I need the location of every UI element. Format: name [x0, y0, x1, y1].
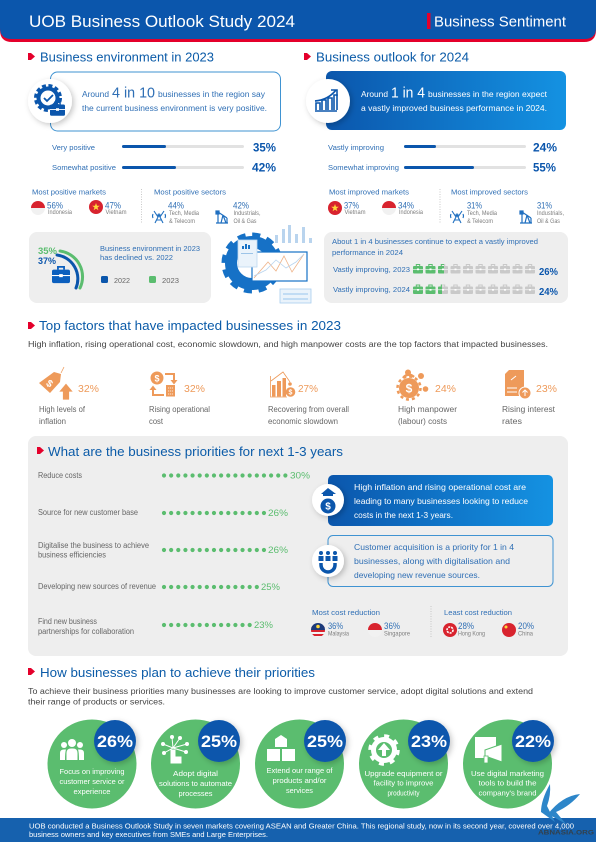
factor: operational cost: Rising operational — [149, 405, 210, 414]
icon: dollar with up arrow: $ — [325, 502, 331, 512]
factor: inflation: 32% — [78, 383, 99, 395]
dot chart: partnerships for collaboration — [38, 627, 134, 636]
item: upgrade equipment 23% — [359, 720, 450, 808]
item: digital solutions 25% — [151, 720, 240, 808]
most positive sectors: 44% — [168, 200, 184, 212]
radial gauge: 37% — [38, 256, 57, 267]
bar: somewhat improving: Somewhat improving — [328, 165, 399, 172]
dot chart: 25% — [261, 582, 281, 593]
bar: vastly improving: 24% — [533, 142, 557, 154]
bar: somewhat positive — [52, 162, 276, 174]
factor: operational cost: cost — [149, 417, 164, 426]
badge 22%: 22% — [515, 732, 551, 751]
panel: business outlook 2024 — [304, 50, 566, 174]
bar: very positive — [52, 142, 276, 154]
item: customer service 26%: customer service or — [60, 777, 125, 786]
most cost reduction: Singapore — [384, 632, 411, 638]
factor: inflation: $ — [44, 378, 55, 391]
dot chart: Developing new sources of revenue — [38, 582, 157, 591]
panel: environment declined vs 2022: has declined vs. 2022 — [100, 253, 173, 262]
callout: customer acquisition — [312, 536, 553, 586]
heading marker — [28, 668, 35, 675]
callout box: 1 in 4 — [391, 84, 425, 102]
dot chart: Source for new customer base — [38, 508, 139, 517]
dot chart: Digitalise the business to achieve — [38, 541, 150, 550]
description: Business environment in 2023 — [100, 244, 200, 253]
pictogram row 2023: 26% — [539, 267, 558, 278]
callout: customer acquisition: businesses, along with digitalisation and — [354, 556, 510, 566]
item: digital solutions 25%: processes — [178, 789, 213, 798]
legend: 2022 — [114, 276, 130, 285]
callout box: Around — [82, 90, 109, 99]
dot chart: 26% — [268, 508, 289, 519]
factor: manpower: $ — [406, 382, 413, 396]
least cost reduction: 28% — [458, 621, 474, 632]
dot chart: 23% — [254, 620, 274, 631]
intro text: High inflation, rising operational cost, economic slowdown, and high manpower costs are the top factors that impacted businesses. — [28, 340, 548, 349]
callout: customer acquisition: developing new revenue sources. — [354, 570, 480, 580]
item: customer service 26%: experience — [74, 787, 110, 796]
callout box — [326, 71, 566, 130]
badge 25%: 25% — [201, 732, 237, 751]
most improved sectors: Most improved sectors — [451, 188, 528, 196]
most cost reduction: Most cost reduction — [312, 608, 380, 617]
panel text: About 1 in 4 businesses continue to expect a vastly improved — [332, 237, 538, 246]
most positive markets — [31, 188, 126, 216]
most positive sectors: Tech, Media — [169, 211, 200, 217]
item: customer service 26% — [48, 720, 136, 808]
callout box — [50, 72, 280, 131]
panel: vastly improving comparison: performance in 2024 — [332, 248, 403, 257]
factor: inflation: High levels of — [39, 405, 86, 414]
callout box: 4 in 10 — [112, 84, 155, 102]
item: range of products 25%: Extend our range of — [266, 766, 333, 775]
heading: How businesses plan to achieve their priorities — [40, 665, 316, 680]
item: digital marketing 22%: Use digital marketing — [471, 769, 544, 778]
item: upgrade equipment 23%: productivity — [388, 788, 420, 798]
most positive sectors — [152, 188, 261, 225]
panel: business priorities — [28, 436, 568, 656]
most positive sectors: Industrials, — [234, 211, 261, 217]
section: top factors — [28, 318, 557, 426]
factor: inflation: inflation — [39, 417, 66, 426]
callout: reduce costs: High inflation and rising operational cost are — [354, 482, 526, 492]
header banner — [0, 0, 596, 42]
most cost reduction: 36% — [384, 621, 400, 632]
most improved markets: 34% — [398, 200, 414, 212]
most positive sectors: Oil & Gas — [234, 219, 256, 225]
most improved sectors: 31% — [537, 200, 552, 212]
factor: interest rates — [502, 370, 557, 426]
heading: Business environment in 2023 — [40, 50, 214, 64]
most positive markets: Most positive markets — [32, 188, 106, 196]
panel: business environment 2023 — [28, 50, 280, 174]
watermark: bird and site name — [538, 784, 594, 836]
radial gauge — [38, 246, 83, 288]
bar: vastly improving — [328, 142, 557, 154]
bar: vastly improving: Vastly improving — [328, 145, 384, 152]
most positive sectors: 42% — [233, 200, 249, 212]
footer: UOB conducted a Business Outlook Study in seven markets covering ASEAN and Greater China. This regional study, now in its second year, covered over 4,000 — [29, 822, 574, 830]
callout box: businesses in the region say — [158, 90, 265, 99]
factor: manpower: (labour) costs — [398, 417, 447, 426]
most improved markets: 37% — [344, 200, 359, 212]
radial gauge: 35% — [38, 246, 58, 257]
most improved sectors — [450, 188, 564, 225]
factor: economic slowdown: Recovering from overall — [268, 405, 349, 414]
dot chart: 26% — [268, 545, 289, 556]
badge 26%: 26% — [97, 732, 133, 751]
heading: What are the business priorities for next 1-3 years — [48, 444, 344, 459]
title: UOB Business Outlook Study 2024 — [29, 12, 295, 31]
icon: gear with briefcase — [28, 79, 72, 123]
footer — [0, 818, 596, 842]
factor: economic slowdown — [268, 372, 349, 426]
most improved sectors: Tech, Media — [467, 211, 498, 217]
most positive sectors: & Telecom — [169, 219, 195, 225]
red accent bar — [427, 13, 430, 29]
legend — [101, 276, 179, 285]
dot chart: 30% — [290, 470, 311, 482]
most improved markets: Most improved markets — [329, 188, 409, 196]
dot chart: Reduce costs — [38, 471, 82, 480]
item: range of products 25%: services — [286, 786, 313, 795]
factor: manpower: High manpower — [398, 405, 457, 414]
least cost reduction — [443, 608, 534, 638]
item: range of products 25%: products and/or — [272, 776, 327, 785]
dot chart: Find new business — [38, 617, 97, 626]
most positive markets: Indonesia — [48, 210, 73, 216]
section: how businesses plan: their range of products or services. — [28, 698, 165, 706]
item: customer service 26%: Focus on improving — [60, 767, 124, 776]
most improved sectors: & Telecom — [467, 219, 493, 225]
heading marker — [37, 447, 44, 454]
intro text: To achieve their business priorities many businesses are looking to improve customer service, adopt digital solutions and extend — [28, 687, 533, 696]
callout: reduce costs: leading to many businesses looking to reduce — [354, 496, 528, 506]
bar: somewhat improving: 55% — [533, 162, 556, 174]
badge 25%: 25% — [307, 732, 343, 751]
pictogram row 2024: Vastly improving, 2024 — [333, 285, 410, 294]
item: range of products 25% — [255, 720, 346, 808]
factor: operational cost: 32% — [184, 383, 205, 395]
illustration: gear with charts — [224, 225, 312, 303]
callout: reduce costs: costs in the next 1-3 years. — [354, 510, 453, 520]
item: upgrade equipment 23%: facility to improve — [374, 778, 434, 788]
pictogram row 2024: 24% — [539, 287, 558, 298]
item: upgrade equipment 23%: Upgrade equipment or — [364, 769, 443, 778]
callout box: the current business environment is very positive. — [82, 104, 267, 113]
bar: very positive: Very positive — [52, 145, 95, 152]
heading marker — [28, 53, 35, 60]
most improved markets — [328, 188, 424, 216]
factor: operational cost — [149, 372, 210, 426]
most positive markets: 47% — [105, 200, 121, 212]
watermark: bird and site name: ABNASIA.ORG — [538, 830, 594, 836]
factor: economic slowdown: $ — [289, 390, 293, 396]
footer: business owners and key executives from SMEs and Large Enterprises. — [29, 830, 268, 839]
heading: Business outlook for 2024 — [316, 50, 469, 64]
dot chart — [38, 470, 311, 636]
panel: vastly improving comparison — [324, 232, 568, 303]
factor: interest rates: 23% — [536, 383, 557, 395]
bar: somewhat positive: Somewhat positive — [52, 165, 116, 172]
pictogram row 2023: Vastly improving, 2023 — [333, 265, 410, 274]
bar: somewhat positive: 42% — [252, 162, 276, 174]
factor: operational cost: $ — [154, 374, 160, 384]
factor: interest rates: Rising interest — [502, 405, 556, 414]
most cost reduction: 36% — [328, 621, 343, 632]
most improved markets: Indonesia — [399, 210, 424, 216]
factor: economic slowdown: 27% — [298, 383, 318, 395]
least cost reduction: 20% — [518, 621, 534, 632]
most positive markets: Vietnam — [106, 210, 126, 216]
icon: growth chart — [306, 79, 350, 123]
item: digital marketing 22%: tools to build the — [478, 778, 536, 788]
callout box: a vastly improved business performance in 2024. — [361, 104, 547, 113]
callout: reduce costs — [312, 475, 553, 526]
badge 23%: 23% — [411, 732, 447, 751]
item: digital solutions 25%: Adopt digital — [173, 769, 218, 778]
icon: customer magnet — [312, 545, 344, 577]
bar: very positive: 35% — [253, 142, 276, 154]
most positive markets: 56% — [47, 200, 63, 212]
dot chart: business efficiencies — [38, 550, 106, 560]
icon: dollar with up arrow — [312, 484, 344, 516]
most improved sectors: 31% — [467, 200, 482, 212]
most positive sectors: Most positive sectors — [154, 188, 226, 196]
section: how businesses plan — [28, 665, 554, 808]
callout box: businesses in the region expect — [428, 90, 548, 99]
most cost reduction: Malaysia — [328, 632, 350, 638]
pictogram row 2024 — [333, 284, 558, 295]
heading marker — [28, 322, 35, 329]
pictogram row 2023 — [333, 264, 558, 275]
least cost reduction: Least cost reduction — [444, 608, 512, 617]
heading: Top factors that have impacted businesses in 2023 — [39, 318, 341, 333]
bar: somewhat improving — [328, 162, 556, 174]
item: digital solutions 25%: solutions to automate — [159, 779, 232, 788]
item: digital marketing 22% — [463, 720, 554, 808]
most improved markets: Vietnam — [344, 210, 366, 216]
legend: 2023 — [162, 276, 179, 285]
least cost reduction: Hong Kong — [458, 632, 485, 638]
panel: environment declined vs 2022 — [29, 232, 211, 303]
heading marker — [304, 53, 311, 60]
factor: interest rates: rates — [502, 417, 522, 426]
item: digital marketing 22%: company's brand — [478, 788, 536, 798]
factor: inflation — [39, 367, 99, 426]
factor: manpower: 24% — [435, 383, 456, 395]
most improved sectors: Industrials, — [537, 211, 564, 217]
most improved sectors: Oil & Gas — [537, 219, 560, 225]
callout box: Around — [361, 90, 388, 99]
least cost reduction: China — [518, 632, 534, 638]
most cost reduction — [311, 608, 411, 638]
factor: manpower — [398, 370, 457, 426]
callout: customer acquisition: Customer acquisition is a priority for 1 in 4 — [354, 542, 514, 552]
topic label: Business Sentiment — [434, 14, 567, 30]
factor: economic slowdown: economic slowdown — [268, 417, 338, 426]
